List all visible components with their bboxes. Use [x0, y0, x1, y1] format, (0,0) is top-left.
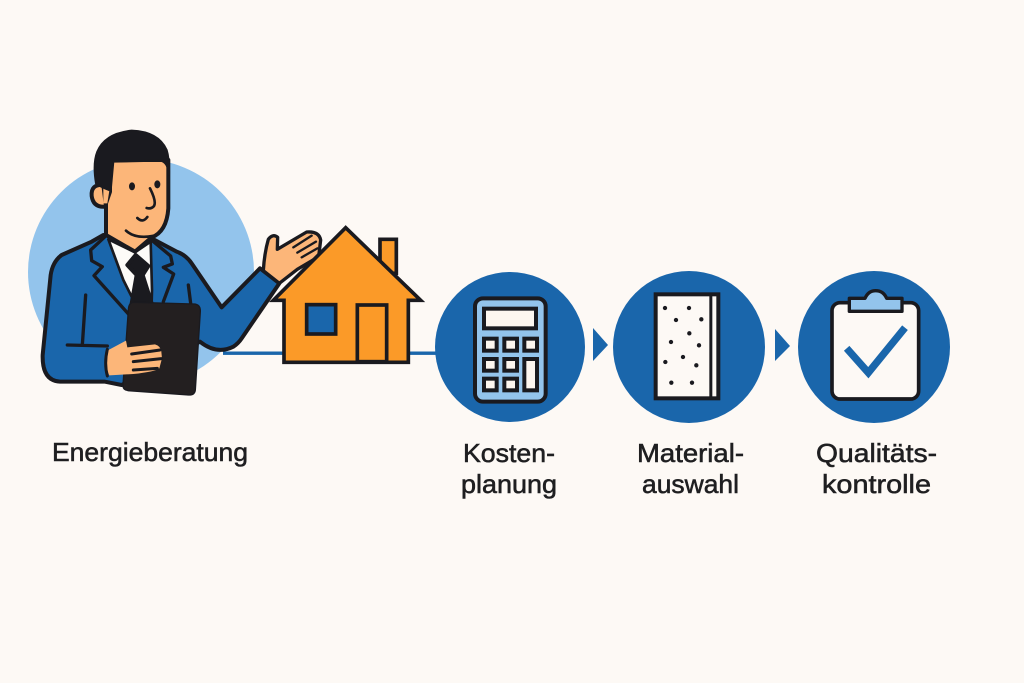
ear: [92, 185, 106, 207]
step: material circle: [613, 271, 765, 423]
illustration: house: [273, 228, 421, 362]
raised hand: [263, 232, 321, 283]
label: Qualitätskontrolle: Qualitäts-: [816, 438, 937, 468]
shirt: [108, 239, 152, 302]
suit jacket and arm: [43, 235, 279, 385]
label: Kostenplanung: planung: [461, 469, 557, 499]
holding hand: [106, 341, 162, 375]
label: Materialauswahl: auswahl: [642, 469, 739, 499]
illustration: consultant: [43, 131, 321, 395]
window: [307, 305, 336, 334]
hair: [95, 131, 169, 191]
arrow: calculator to material: [593, 328, 608, 361]
house body and roof: [273, 228, 421, 362]
lapels: [67, 237, 191, 346]
tablet: [123, 302, 200, 395]
label: Kostenplanung: [461, 438, 557, 499]
arrow: material to quality: [775, 329, 790, 361]
icon: light blue circle behind consultant: [28, 159, 254, 385]
door: [357, 305, 387, 362]
head and neck: [106, 160, 168, 252]
chimney: [380, 239, 396, 273]
label: Qualitätskontrolle: [816, 438, 937, 499]
step: calculator circle: [435, 272, 585, 422]
label: Materialauswahl: [637, 438, 744, 499]
step: quality control circle: [798, 271, 950, 423]
label: Kostenplanung: Kosten-: [463, 438, 555, 468]
connector line from consultant through house to calculator: [223, 352, 438, 355]
label: Qualitätskontrolle: kontrolle: [822, 469, 931, 499]
tie: [127, 255, 152, 303]
icon: calculator: [475, 298, 546, 402]
label: Materialauswahl: Material-: [637, 438, 744, 468]
label: Energieberatung: Energieberatung: [52, 437, 248, 467]
icon: insulation panel: [656, 294, 718, 398]
icon: clipboard with check mark: [832, 291, 919, 399]
face details: [126, 180, 160, 237]
